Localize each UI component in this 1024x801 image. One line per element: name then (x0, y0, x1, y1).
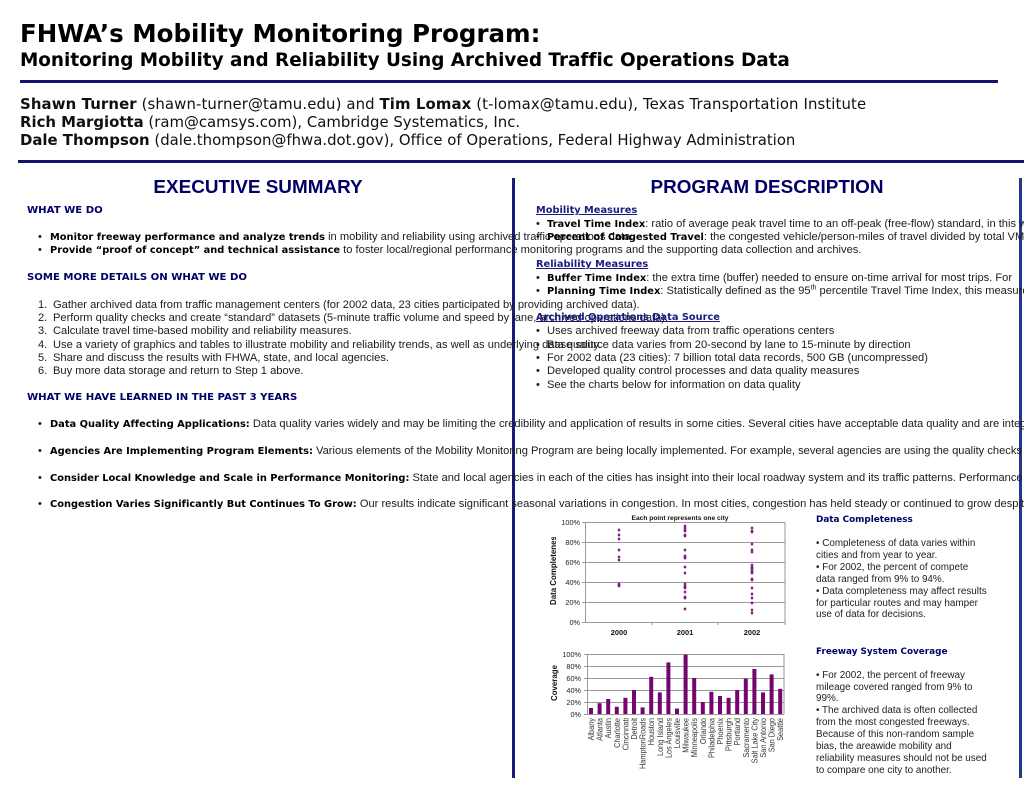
mobility measures: Percent of Congested Travel: the congested vehicle/person-miles of travel divided by total VMT (547, 231, 1024, 243)
chart: freeway coverage bars: Austin (604, 718, 613, 738)
heading: what we do: WHAT WE DO (27, 205, 103, 216)
reliability measures: • (536, 272, 540, 284)
numbered steps: Share and discuss the results with FHWA, state, and local agencies. (53, 352, 389, 364)
what we do bullets (38, 231, 861, 256)
reliability measures: Buffer Time Index: the extra time (buffer) needed to ensure on-time arrival for most trips. For (547, 272, 1012, 284)
chart: data completeness scatter: 0% (569, 618, 581, 627)
chart: freeway coverage bars: Atlanta (595, 717, 605, 741)
chart: freeway coverage bars: Sacramento (742, 718, 751, 758)
authors: Rich Margiotta (ram@camsys.com), Cambridge Systematics, Inc. (20, 113, 520, 131)
lessons bullets (38, 418, 1024, 510)
text: freeway system coverage notes: reliability measures should not be used (816, 753, 987, 764)
chart: freeway coverage bars: 0% (570, 710, 582, 719)
archived operations data source: • (536, 365, 540, 377)
numbered steps: Calculate travel time-based mobility and reliability measures. (53, 325, 352, 337)
numbered steps: 5. (38, 352, 47, 364)
chart: freeway coverage bars: Milwaukee (681, 718, 691, 753)
chart: freeway coverage bars: Minneapolis (690, 718, 699, 757)
panel: executive summary (27, 177, 1024, 510)
chart: freeway coverage bars: Los Angeles (664, 718, 673, 758)
text: freeway system coverage notes: bias, the areawide mobility and (816, 741, 952, 752)
heading: executive summary: EXECUTIVE SUMMARY (153, 177, 363, 198)
chart: freeway coverage bars: San Antonio (759, 718, 768, 758)
lessons bullets: Congestion Varies Significantly But Continues To Grow: Our results indicate significant seasonal variations in congestion. In most cities, congestion has held steady or continued to grow despite (50, 498, 1024, 510)
chart: data completeness scatter: 100% (561, 518, 581, 527)
text: freeway system coverage notes: mileage covered ranged from 9% to (816, 682, 972, 693)
chart: data completeness scatter: 20% (565, 598, 581, 607)
chart: freeway coverage bars: Seattle (776, 718, 785, 741)
reliability measures: Planning Time Index: Statistically defined as the 95th percentile Travel Time Index, this measure (547, 284, 1024, 297)
reliability measures (536, 259, 1024, 297)
subtitle: Monitoring Mobility and Reliability Using Archived Traffic Operations Data (20, 50, 790, 71)
chart: data completeness scatter: 60% (565, 558, 581, 567)
chart: freeway coverage bars: 80% (566, 662, 582, 671)
lessons bullets: • (38, 472, 42, 484)
chart: freeway coverage bars: Salt Lake City (750, 718, 759, 763)
archived operations data source (536, 312, 928, 391)
heading: program description: PROGRAM DESCRIPTION (650, 177, 884, 198)
what we do bullets: Provide “proof of concept” and technical assistance to foster local/regional performance monitoring programs and the supporting data collection and archives. (50, 244, 861, 256)
archived operations data source: • (536, 325, 540, 337)
text: data completeness notes: data ranged from 9% to 94%. (816, 574, 944, 585)
text: freeway system coverage notes: to compare one city to another. (816, 765, 952, 776)
title: FHWA’s Mobility Monitoring Program: (20, 19, 540, 48)
chart: freeway coverage bars: Phoenix (716, 718, 725, 745)
what we do bullets: • (38, 244, 42, 256)
chart: freeway coverage bars: 20% (566, 698, 582, 707)
chart: freeway coverage bars: Portland (733, 718, 742, 745)
lessons bullets: Consider Local Knowledge and Scale in Performance Monitoring: State and local agencies in each of the cities has insight into their local roadway system and its traffic patterns. Performance (50, 472, 1023, 484)
text: freeway system coverage notes: 99%. (816, 693, 839, 704)
archived operations data source: • (536, 339, 540, 351)
text: data completeness notes: cities and from year to year. (816, 550, 937, 561)
chart: freeway coverage bars: Charlotte (613, 718, 622, 748)
chart: freeway coverage bars: HamptonRoads (638, 718, 648, 769)
mobility measures: • (536, 218, 540, 230)
chart: data completeness scatter: Data Completeness (549, 531, 558, 605)
chart: data completeness scatter: 2001 (677, 628, 693, 637)
text: freeway system coverage notes: • For 2002, the percent of freeway (816, 670, 965, 681)
chart: freeway coverage bars: Albany (587, 718, 596, 740)
chart: freeway coverage bars: 40% (566, 686, 582, 695)
numbered steps: 6. (38, 365, 47, 377)
what we do bullets: Monitor freeway performance and analyze trends in mobility and reliability using archived traffic operations data. (50, 231, 633, 243)
numbered steps: Buy more data storage and return to Step 1 above. (53, 365, 303, 377)
text: data completeness notes (816, 515, 987, 620)
text: freeway system coverage notes: Because of this non-random sample (816, 729, 974, 740)
mobility measures (536, 205, 1024, 243)
authors: Shawn Turner (shawn-turner@tamu.edu) and Tim Lomax (t-lomax@tamu.edu), Texas Transportation Institute (20, 95, 866, 113)
archived operations data source: See the charts below for information on data quality (547, 379, 801, 391)
lessons bullets: Agencies Are Implementing Program Elements: Various elements of the Mobility Monitoring Program are being locally implemented. For example, several agencies are using the quality checks to (50, 445, 1024, 457)
text: data completeness notes: • Data completeness may affect results (816, 586, 987, 597)
archived operations data source: Uses archived freeway data from traffic operations centers (547, 325, 834, 337)
chart: data completeness scatter: 2002 (744, 628, 760, 637)
text: freeway system coverage notes: from the most congested freeways. (816, 717, 970, 728)
chart: freeway coverage bars: 60% (566, 674, 582, 683)
archived operations data source: Archived Operations Data Source (536, 312, 720, 323)
archived operations data source: Base source data varies from 20-second by lane to 15-minute by direction (547, 339, 911, 351)
chart: data completeness scatter: 40% (565, 578, 581, 587)
numbered steps: Perform quality checks and create “standard” datasets (5-minute traffic volume and speed by lane, archived operations data). (53, 312, 668, 324)
numbered steps: Gather archived data from traffic management centers (for 2002 data, 23 cities participated by providing archived data). (53, 299, 640, 311)
text: freeway system coverage notes (816, 647, 987, 776)
numbered steps: 3. (38, 325, 47, 337)
panel: program description (536, 177, 1024, 391)
authors (20, 95, 866, 149)
reliability measures: • (536, 285, 540, 297)
archived operations data source: Developed quality control processes and data quality measures (547, 365, 859, 377)
text: freeway system coverage notes: Freeway System Coverage (816, 647, 947, 657)
archived operations data source: • (536, 379, 540, 391)
mobility measures: Mobility Measures (536, 205, 637, 216)
numbered steps: Use a variety of graphics and tables to illustrate mobility and reliability trends, as well as underlying data quality. (53, 339, 601, 351)
chart: data completeness scatter: 80% (565, 538, 581, 547)
chart: freeway coverage bars: Louisville (673, 718, 682, 748)
heading: more details: SOME MORE DETAILS ON WHAT WE DO (27, 272, 247, 283)
chart: freeway coverage bars: Detroit (630, 717, 639, 740)
numbered steps: 2. (38, 312, 47, 324)
chart: freeway coverage bars: Houston (647, 718, 656, 745)
archived operations data source: • (536, 352, 540, 364)
authors: Dale Thompson (dale.thompson@fhwa.dot.gov), Office of Operations, Federal Highway Administration (20, 131, 795, 149)
chart: freeway coverage bars: Cincinnati (621, 718, 630, 750)
chart: freeway coverage bars: San Diego (767, 718, 777, 752)
text: data completeness notes: Data Completeness (816, 515, 913, 525)
mobility measures: • (536, 231, 540, 243)
text: data completeness notes: • Completeness of data varies within (816, 538, 975, 549)
chart: freeway coverage bars: Pittsburgh (724, 718, 734, 751)
archived operations data source: For 2002 data (23 cities): 7 billion total data records, 500 GB (uncompressed) (547, 352, 928, 364)
text: data completeness notes: • For 2002, the percent of compete (816, 562, 968, 573)
chart: freeway coverage bars: Philadelphia (707, 717, 716, 758)
text: data completeness notes: use of data for decisions. (816, 609, 926, 620)
numbered steps: 1. (38, 299, 47, 311)
what we do bullets: • (38, 231, 42, 243)
lessons bullets: • (38, 445, 42, 457)
chart: data completeness scatter: 2000 (611, 628, 627, 637)
lessons bullets: • (38, 418, 42, 430)
chart: data completeness scatter (550, 516, 786, 635)
text: data completeness notes: for particular routes and may hamper (816, 598, 978, 609)
numbered steps: 4. (38, 339, 47, 351)
chart: freeway coverage bars: Coverage (550, 664, 559, 701)
chart: freeway coverage bars: 100% (562, 650, 582, 659)
reliability measures: Reliability Measures (536, 259, 648, 270)
lessons bullets: • (38, 498, 42, 510)
chart: freeway coverage bars: Long Island (656, 718, 665, 756)
numbered steps (38, 299, 668, 377)
chart: data completeness scatter: Each point represents one city (632, 515, 729, 522)
chart: freeway coverage bars: Orlando (699, 718, 708, 744)
text: freeway system coverage notes: • The archived data is often collected (816, 705, 977, 716)
heading: what we have learned: WHAT WE HAVE LEARNED IN THE PAST 3 YEARS (27, 392, 297, 403)
